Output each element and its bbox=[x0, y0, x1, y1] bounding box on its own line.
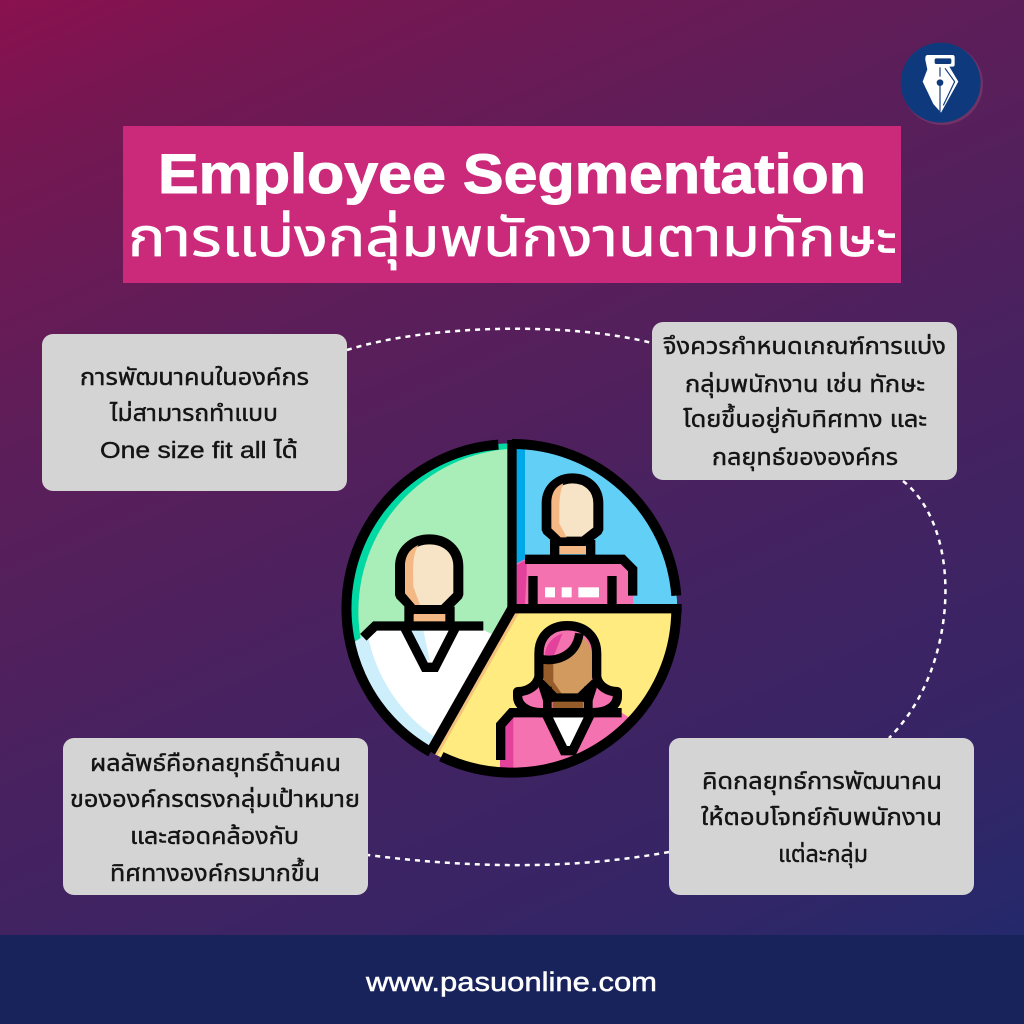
person: top right bbox=[525, 478, 633, 605]
card: top right: กลุ่มพนักงาน เช่น ทักษะ bbox=[685, 371, 925, 398]
card: bottom right: คิดกลยุทธ์การพัฒนาคน bbox=[702, 768, 942, 795]
card: top right: จึงควรกำหนดเกณฑ์การแบ่ง bbox=[663, 333, 946, 359]
shirt: white bbox=[355, 630, 492, 745]
shirt: pink 1 bbox=[517, 558, 633, 605]
card: top right: โดยขึ้นอยู่กับทิศทาง และ bbox=[683, 403, 927, 434]
icon: employee segment pie bbox=[340, 430, 690, 780]
footer bar bbox=[0, 935, 1024, 1024]
card: bottom left bbox=[63, 738, 368, 895]
card: top right: กลยุทธ์ขององค์กร bbox=[712, 444, 898, 471]
person: woman bottom bbox=[501, 626, 622, 760]
dividers bbox=[512, 440, 682, 609]
person: male left bbox=[363, 539, 483, 667]
title banner bbox=[123, 126, 901, 283]
card: bottom right: ให้ตอบโจทย์กับพนักงาน bbox=[701, 804, 942, 830]
card: top left: ไม่สามารถทำแบบ bbox=[109, 400, 278, 426]
title: English: Employee Segmentation bbox=[158, 142, 866, 205]
card: top left: One size fit all ได้ bbox=[100, 437, 298, 463]
card: top left: การพัฒนาคนในองค์กร bbox=[80, 364, 309, 390]
card: bottom left: ขององค์กรตรงกลุ่มเป้าหมาย bbox=[70, 786, 360, 813]
footer url: www.pasuonline.com bbox=[365, 967, 657, 997]
card: bottom right: แต่ละกลุ่ม bbox=[778, 841, 868, 868]
card: top right bbox=[652, 322, 957, 480]
shirt: pink 2 bbox=[513, 712, 628, 768]
outer ring bbox=[346, 445, 498, 752]
card: bottom left: ทิศทางองค์กรมากขึ้น bbox=[110, 857, 320, 886]
card: bottom left: ผลลัพธ์คือกลยุทธ์ด้านคน bbox=[90, 750, 341, 777]
card: top left bbox=[42, 334, 347, 491]
dotted cycle connectors bbox=[347, 329, 945, 865]
card: bottom right bbox=[669, 738, 974, 895]
card: bottom left: และสอดคล้องกับ bbox=[130, 823, 299, 849]
logo: pen nib badge bbox=[901, 43, 983, 125]
title: Thai: การแบ่งกลุ่มพนักงานตามทักษะ bbox=[128, 208, 897, 270]
